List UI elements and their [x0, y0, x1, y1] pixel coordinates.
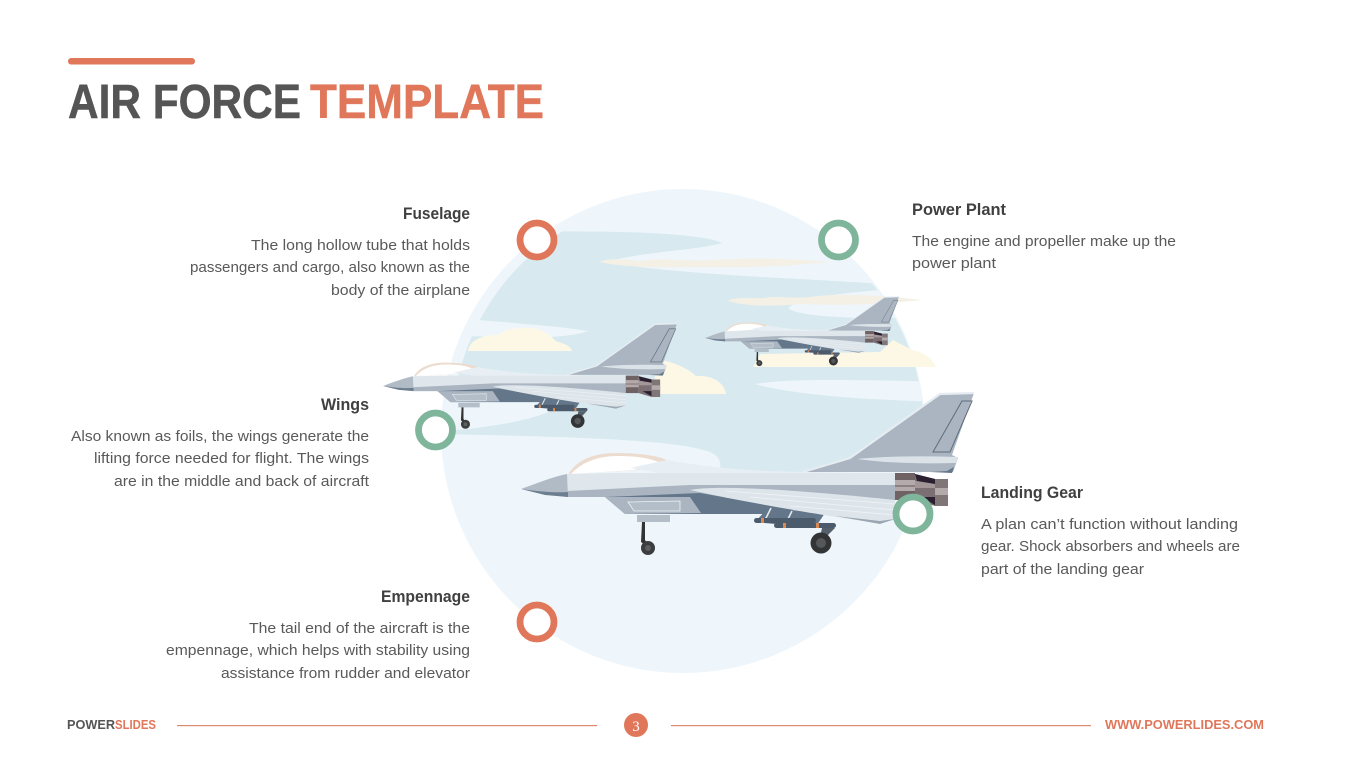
footer brand: POWER [67, 718, 115, 732]
sky and clouds [456, 232, 922, 472]
marker: landing gear [896, 497, 930, 531]
text block: power plant [912, 201, 1176, 272]
text block: empennage [166, 588, 470, 682]
footer website: WWW.POWERLIDES.COM [1105, 718, 1264, 732]
marker: power plant [822, 223, 856, 257]
footer brand [67, 718, 156, 732]
jet: large foreground [521, 393, 974, 555]
marker: wings [418, 413, 452, 447]
text block: wings: lifting force needed for flight. The wings [94, 450, 369, 467]
pale background disc [441, 189, 925, 673]
footer brand: SLIDES [115, 718, 156, 732]
text block: fuselage: body of the airplane [331, 282, 470, 299]
marker: fuselage [520, 223, 554, 257]
text block: power plant: power plant [912, 255, 997, 272]
text block: fuselage: passengers and cargo, also known as the [190, 259, 470, 276]
text block: landing gear [981, 484, 1240, 578]
cloud streaks [600, 259, 922, 306]
title [68, 76, 544, 129]
text block: wings: Wings [321, 396, 369, 414]
text block: landing gear: gear. Shock absorbers and wheels are [981, 538, 1240, 555]
text block: wings: are in the middle and back of aircraft [114, 473, 370, 490]
text block: wings [71, 396, 370, 490]
text block: fuselage: The long hollow tube that holds [251, 237, 470, 254]
text block: fuselage [190, 205, 470, 299]
text block: landing gear: A plan can’t function without landing [981, 516, 1238, 533]
title: TEMPLATE [310, 76, 544, 129]
title: AIR FORCE [68, 76, 301, 129]
top accent bar [68, 58, 195, 64]
marker: empennage [520, 605, 554, 639]
text block: empennage: assistance from rudder and elevator [221, 665, 470, 682]
text block: wings: Also known as foils, the wings generate the [71, 428, 369, 445]
text block: power plant: Power Plant [912, 201, 1006, 219]
text block: landing gear: part of the landing gear [981, 561, 1144, 578]
text block: empennage: The tail end of the aircraft is the [249, 620, 470, 637]
central sky illustration [383, 189, 974, 673]
jet: upper left [383, 324, 677, 429]
page number [624, 713, 648, 737]
footer [67, 713, 1264, 737]
page number: 3 [632, 719, 640, 735]
cream clouds [468, 328, 936, 394]
jet: upper right [705, 297, 899, 366]
text block: landing gear: Landing Gear [981, 484, 1084, 502]
text block: empennage: Empennage [381, 588, 470, 606]
text block: fuselage: Fuselage [403, 205, 470, 223]
text block: power plant: The engine and propeller make up the [912, 233, 1176, 250]
text block: empennage: empennage, which helps with stability using [166, 642, 470, 659]
